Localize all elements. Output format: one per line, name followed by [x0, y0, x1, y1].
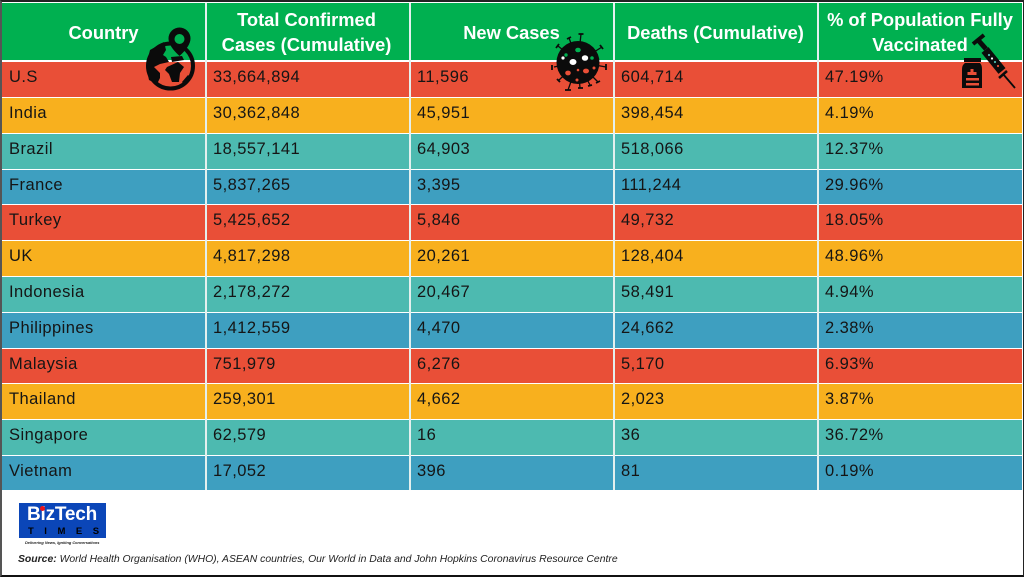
heading: Total Confirmed Cases: Cases (Cumulative) [222, 34, 391, 55]
row: Thailand [2, 384, 1022, 419]
row: Philippines [2, 313, 1022, 348]
row: Singapore: 16 [417, 426, 436, 444]
row: UK: UK [9, 247, 33, 265]
row: Thailand: 259,301 [213, 390, 276, 408]
row: Brazil: 64,903 [417, 140, 470, 158]
row: France: 111,244 [621, 176, 681, 194]
row: France: 3,395 [417, 176, 461, 194]
row: Turkey: 49,732 [621, 211, 674, 229]
row: Turkey: Turkey [9, 211, 62, 229]
row: Brazil: 518,066 [621, 140, 684, 158]
row: Vietnam: 396 [417, 462, 446, 480]
row: Vietnam: 81 [621, 462, 640, 480]
row: India: 4.19% [825, 104, 874, 122]
row: Thailand: 4,662 [417, 390, 461, 408]
heading: Country: Country [68, 22, 139, 42]
heading: Total Confirmed Cases: Total Confirmed [237, 9, 376, 30]
row: Thailand: Thailand [9, 390, 76, 408]
row: Indonesia [2, 277, 1022, 312]
heading: % of Population Fully Vaccinated: Vaccinated [872, 34, 968, 55]
icon: globe with location pin [146, 28, 195, 90]
heading: Deaths: Deaths (Cumulative) [627, 22, 804, 42]
row: UK: 128,404 [621, 247, 684, 265]
row: U.S [2, 62, 1022, 97]
row: Indonesia: 4.94% [825, 283, 874, 301]
icon: coronavirus [551, 33, 607, 91]
row: Philippines: 2.38% [825, 319, 874, 337]
logo box: TIMES [28, 526, 110, 537]
source note: Source: World Health Organisation (WHO), ASEAN countries, Our World in Data and John Hopkins Coronavirus Resource Centre [18, 554, 618, 565]
row: France: 29.96% [825, 176, 884, 194]
row: Singapore [2, 420, 1022, 455]
heading: Total Confirmed Cases [222, 9, 391, 55]
row: Brazil: 18,557,141 [213, 140, 300, 158]
row: Malaysia: 6.93% [825, 355, 874, 373]
row: Philippines: 24,662 [621, 319, 674, 337]
row: Malaysia: Malaysia [9, 355, 78, 373]
row: France: 5,837,265 [213, 176, 290, 194]
logo: BizTech Times [19, 503, 110, 545]
heading: % of Population Fully Vaccinated [827, 9, 1013, 55]
row: U.S: 47.19% [825, 68, 884, 86]
heading: % of Population Fully Vaccinated: % of Population Fully [827, 9, 1013, 30]
row: Brazil [2, 134, 1022, 169]
row: Brazil: Brazil [9, 140, 53, 158]
row: U.S: 11,596 [417, 68, 469, 86]
row: Vietnam: 17,052 [213, 462, 266, 480]
row: Vietnam [2, 456, 1022, 490]
logo box: BizTech [27, 504, 97, 525]
row: India [2, 98, 1022, 133]
logo box [19, 503, 106, 538]
row: Singapore: 36.72% [825, 426, 884, 444]
row: U.S: 33,664,894 [213, 68, 300, 86]
row: UK: 48.96% [825, 247, 884, 265]
header band [2, 3, 1022, 60]
row: Philippines: 4,470 [417, 319, 461, 337]
row: Singapore: Singapore [9, 426, 88, 444]
row: Turkey: 18.05% [825, 211, 884, 229]
logo: BizTech Times: Delivering News, Igniting Conversations [25, 540, 99, 545]
row: Philippines: 1,412,559 [213, 319, 290, 337]
row: Singapore: 36 [621, 426, 640, 444]
row: Indonesia: 58,491 [621, 283, 674, 301]
row: Turkey: 5,425,652 [213, 211, 290, 229]
row: Malaysia: 5,170 [621, 355, 665, 373]
heading: New Cases: New Cases [463, 22, 560, 42]
icon: syringe and vaccine bottle [962, 34, 1016, 89]
row: Indonesia: 2,178,272 [213, 283, 290, 301]
row: U.S: 604,714 [621, 68, 684, 86]
row: Philippines: Philippines [9, 319, 94, 337]
row: Turkey: 5,846 [417, 211, 461, 229]
row: India: 45,951 [417, 104, 470, 122]
row: UK: 20,261 [417, 247, 470, 265]
row: Indonesia: 20,467 [417, 283, 470, 301]
row: Thailand: 3.87% [825, 390, 874, 408]
row: Thailand: 2,023 [621, 390, 665, 408]
row: France: France [9, 176, 63, 194]
row: India: 30,362,848 [213, 104, 300, 122]
row: Malaysia [2, 349, 1022, 383]
row: Malaysia: 6,276 [417, 355, 461, 373]
row: India: 398,454 [621, 104, 684, 122]
row: UK: 4,817,298 [213, 247, 290, 265]
row: U.S: U.S [9, 68, 38, 86]
row: India: India [9, 104, 47, 122]
row: Indonesia: Indonesia [9, 283, 85, 301]
row: France [2, 170, 1022, 204]
row: Malaysia: 751,979 [213, 355, 276, 373]
row: Turkey [2, 205, 1022, 240]
row: UK [2, 241, 1022, 276]
row: Vietnam: Vietnam [9, 462, 72, 480]
row: Brazil: 12.37% [825, 140, 884, 158]
row: Singapore: 62,579 [213, 426, 266, 444]
row: Vietnam: 0.19% [825, 462, 874, 480]
